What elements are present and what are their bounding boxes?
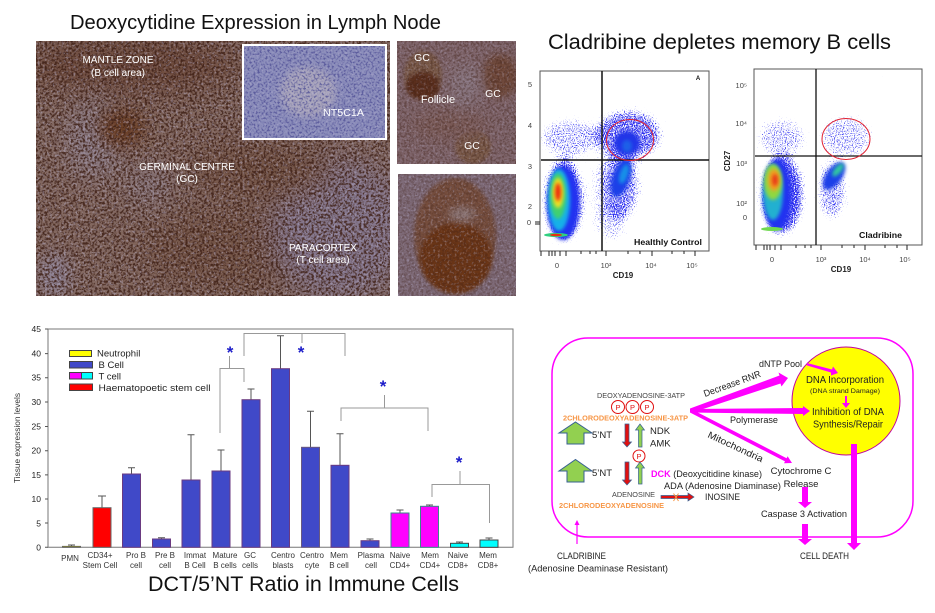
- x axis category labels: CD34+: [87, 551, 113, 560]
- y axis title: Tissue expression levels: [12, 393, 22, 483]
- x axis category labels: Centro: [300, 551, 325, 560]
- x axis category labels: Mem: [479, 551, 497, 560]
- phosphate circles: [612, 400, 654, 462]
- x axis ticks: [756, 245, 907, 250]
- title: cladribine depletes memory B cells: Cladribine depletes memory B cells: [548, 30, 891, 54]
- legend: [70, 348, 210, 394]
- x axis category labels: Mem: [421, 551, 439, 560]
- chart: flow plot cladribine: [723, 69, 922, 274]
- title: deoxycytidine expression: Deoxycytidine Expression in Lymph Node: [70, 11, 441, 34]
- chart: flow plot healthy control: [527, 71, 709, 280]
- x axis category labels: cells: [242, 561, 258, 570]
- bar: Mem CD8+: [480, 538, 498, 547]
- y axis tick labels: 0: [743, 213, 747, 222]
- x axis category labels: B cell: [329, 561, 349, 570]
- panel: follicle histology: [397, 41, 518, 164]
- x axis category labels: blasts: [273, 561, 293, 570]
- x axis category labels: Pro B: [126, 551, 146, 560]
- arrow: to polymerase: [690, 406, 810, 416]
- y axis labels: 35: [32, 372, 41, 382]
- panel letter: A: [696, 76, 701, 82]
- label: cytochrome C release: Cytochrome C: [771, 466, 831, 477]
- large green arrow upper: [559, 422, 592, 444]
- label: DCK: DCK (Deoxycitidine kinase): [651, 469, 762, 480]
- significance stars: *: [456, 453, 463, 472]
- green arrow up upper: [636, 424, 644, 447]
- label: cell death: CELL DEATH: [800, 551, 849, 561]
- red arrow down lower: [622, 462, 632, 485]
- bar: Mature B cells: [212, 450, 230, 547]
- density: naive B cells: [818, 158, 850, 194]
- label: mitochondria: Mitochondria: [706, 430, 765, 465]
- bar: CD34+ stem cell: [93, 496, 111, 547]
- x axis category labels: CD8+: [478, 561, 499, 570]
- yellow DNA circle: [792, 347, 900, 455]
- scatter cloud: [758, 115, 872, 235]
- panel: germinal centre close-up: [398, 174, 516, 296]
- legend: Neutrophil: [97, 348, 140, 360]
- label: cytochrome C release: Release: [784, 479, 818, 490]
- x axis category labels: cell: [159, 561, 171, 570]
- y axis tick labels: 2: [528, 202, 532, 211]
- x axis category labels: Pre B: [155, 551, 175, 560]
- label: NT5C1A: NT5C1A: [323, 108, 364, 119]
- blocked arrow adenosine to inosine: [661, 493, 694, 501]
- label: polymerase: Polymerase: [730, 415, 778, 426]
- bar: Pro B cell: [122, 468, 140, 547]
- label: GC top left: GC: [414, 52, 430, 64]
- green arrow up lower: [636, 462, 644, 484]
- phosphate letters: P: [615, 403, 621, 412]
- bar: Naive CD8+: [450, 542, 468, 547]
- y axis tick labels: 4: [528, 121, 532, 130]
- y axis tick labels: 10³: [736, 159, 747, 168]
- x axis tick labels: 10³: [601, 261, 612, 270]
- x axis category labels: Immat: [184, 551, 207, 560]
- y axis labels: 20: [32, 446, 41, 456]
- y axis tick labels: 3: [528, 162, 532, 171]
- label: 5'NT upper: 5’NT: [592, 430, 612, 441]
- x axis tick labels: 0: [770, 255, 774, 264]
- arrow: dNTP pool to DNA incorporation: [807, 363, 838, 376]
- legend: T cell: [98, 372, 121, 382]
- label: paracortex: PARACORTEX: [289, 243, 357, 254]
- y axis tick labels: 5: [528, 80, 532, 89]
- label: 2-chlorodeoxyadenosine-3ATP: 2CHLORODEOXYADENOSINE-3ATP: [563, 414, 688, 422]
- density: memory and naive B cells: [606, 131, 640, 200]
- x axis category labels: CD4+: [420, 561, 441, 570]
- bar: GC cells: [242, 389, 260, 547]
- y axis labels: 30: [32, 397, 41, 407]
- bar: Pre B cell: [152, 538, 170, 547]
- y axis labels: 5: [36, 518, 41, 528]
- bar: Centro blasts: [272, 336, 290, 547]
- x axis category labels: Mature: [213, 551, 238, 560]
- label: dNTP pool: dNTP Pool: [759, 359, 802, 370]
- arrow: release to caspase: [798, 487, 812, 508]
- scatter cloud: [540, 109, 662, 242]
- arrow: cladribine entry: [574, 520, 580, 544]
- label: mantle zone: (B cell area): [91, 68, 145, 79]
- label: inhibition of DNA synthesis: Inhibition of DNA: [812, 406, 884, 418]
- red arrow down upper: [622, 424, 632, 447]
- x axis tick labels: 0: [555, 261, 559, 270]
- y axis labels: 40: [32, 348, 41, 358]
- bar: Immat B cell: [182, 435, 200, 547]
- arrow: to cell death from DNA: [847, 444, 861, 550]
- x axis category labels: Mem: [330, 551, 348, 560]
- bar: Mem CD4+: [420, 505, 438, 547]
- label: ADA: ADA (Adenosine Diaminase): [664, 481, 781, 492]
- label: DNA strand damage: (DNA strand Damage): [810, 388, 880, 395]
- label: GC right: GC: [485, 88, 501, 100]
- label: deoxyadenosine-3ATP: DEOXYADENOSINE-3ATP: [597, 391, 685, 400]
- y axis labels: 25: [32, 422, 41, 432]
- y axis tick labels: 10⁴: [735, 119, 747, 128]
- panel: NT5C1A inset: [242, 44, 387, 140]
- y axis tick labels: 0: [527, 218, 531, 227]
- legend: B Cell: [98, 360, 124, 371]
- x axis category labels: Naive: [448, 551, 469, 560]
- label: inosine: INOSINE: [705, 492, 740, 503]
- x axis category labels: Stem Cell: [83, 561, 118, 570]
- arrow: DNA damage to inhibition: [842, 396, 850, 408]
- x axis tick labels: 10⁵: [899, 255, 911, 264]
- significance stars: *: [227, 343, 234, 362]
- phosphate letters: [615, 403, 650, 461]
- cell boundary: [552, 338, 913, 537]
- quadrant gate lines: [541, 71, 709, 251]
- label: AMK: AMK: [650, 438, 671, 450]
- bar: Plasma cell: [361, 539, 379, 547]
- plot label: Healthly Control: [634, 237, 702, 247]
- arrow: to mitochondria: [690, 408, 792, 463]
- density: left population: [544, 166, 579, 240]
- y axis labels: 15: [32, 470, 41, 480]
- label: cladribine: CLADRIBINE: [557, 551, 606, 561]
- label: 2-chlorodeoxyadenosine: 2CHLORODEOXYADENOSINE: [559, 501, 664, 510]
- label: germinal centre: GERMINAL CENTRE: [139, 162, 235, 173]
- x axis title: CD19: [831, 265, 852, 274]
- x axis title: CD19: [613, 271, 634, 280]
- label: 5'NT lower: 5’NT: [592, 468, 612, 479]
- x axis category labels: cell: [130, 561, 142, 570]
- x axis category labels: B Cell: [184, 561, 206, 570]
- label: inhibition of DNA synthesis: Synthesis/Repair: [813, 418, 883, 430]
- x axis category labels: B cells: [213, 561, 237, 570]
- x axis category labels: Naive: [390, 551, 411, 560]
- label: GC bottom: GC: [464, 140, 480, 152]
- phosphate letters: P: [644, 403, 650, 412]
- label: caspase 3 activation: Caspase 3 Activation: [761, 509, 847, 520]
- arrow: to decrease RNR: [690, 372, 788, 413]
- x axis ticks: [541, 251, 695, 256]
- plot frame: [48, 329, 513, 547]
- x axis category labels: CD8+: [448, 561, 469, 570]
- y axis tick labels: 10⁵: [736, 81, 747, 90]
- x axis tick labels: 10⁵: [686, 261, 698, 270]
- bar: Centro cyte: [302, 411, 320, 547]
- bar chart: DCT/5'NT ratio: [12, 324, 513, 570]
- label: adenosine: ADENOSINE: [612, 490, 655, 499]
- x axis tick labels: 10³: [816, 255, 827, 264]
- y axis ticks: [45, 329, 48, 547]
- label: DNA incorporation: DNA Incorporation: [806, 374, 884, 386]
- large green arrow lower: [559, 460, 592, 482]
- diagram: cladribine pathway: [528, 338, 913, 574]
- x axis category labels: CD4+: [390, 561, 411, 570]
- gate: memory B cells: [822, 118, 870, 160]
- x axis category labels: GC: [244, 551, 256, 560]
- legend: Haematopoetic stem cell: [98, 383, 210, 394]
- panel: main lymph node histology: [36, 41, 390, 296]
- bar: PMN: [62, 545, 80, 547]
- x axis category labels: [61, 551, 499, 570]
- label: mantle zone: MANTLE ZONE: [82, 55, 154, 66]
- bar: Naive CD4+: [391, 510, 409, 547]
- y axis labels: 10: [32, 494, 41, 504]
- x axis category labels: cell: [365, 561, 377, 570]
- significance stars: [227, 343, 463, 472]
- x axis category labels: Plasma: [358, 551, 385, 560]
- x axis tick labels: 10⁴: [859, 255, 871, 264]
- label: NDK: NDK: [650, 426, 671, 437]
- label: decrease RNR: Decrease RNR: [702, 369, 763, 400]
- y axis labels: 45: [32, 324, 41, 334]
- significance stars: *: [380, 377, 387, 396]
- bar: Mem B cell: [331, 434, 349, 547]
- y axis labels: 0: [36, 542, 41, 552]
- x axis category labels: cyte: [305, 561, 320, 570]
- label: adenosine deaminase resistant: (Adenosine Deaminase Resistant): [528, 564, 668, 574]
- arrow: caspase to cell death: [798, 524, 812, 545]
- x axis tick labels: 10⁴: [645, 261, 657, 270]
- x axis category labels: PMN: [61, 554, 79, 563]
- gate: memory B cells: [606, 120, 654, 160]
- significance brackets: [220, 334, 490, 523]
- y axis dense ticks: [535, 222, 540, 224]
- phosphate letters: P: [636, 452, 642, 461]
- quadrant gate lines: [755, 69, 922, 245]
- label: paracortex: (T cell area): [296, 255, 350, 266]
- title: DCT/5'NT ratio in immune cells: DCT/5’NT Ratio in Immune Cells: [148, 572, 459, 596]
- phosphate letters: P: [630, 403, 635, 412]
- x axis category labels: Centro: [271, 551, 296, 560]
- significance stars: *: [298, 343, 305, 362]
- y axis tick labels: 10²: [736, 199, 747, 208]
- label: germinal centre: (GC): [176, 174, 198, 185]
- y axis title: CD27: [723, 150, 732, 171]
- plot label: Cladribine: [859, 230, 902, 240]
- density: left population: [761, 159, 791, 231]
- label: follicle: Follicle: [421, 94, 455, 106]
